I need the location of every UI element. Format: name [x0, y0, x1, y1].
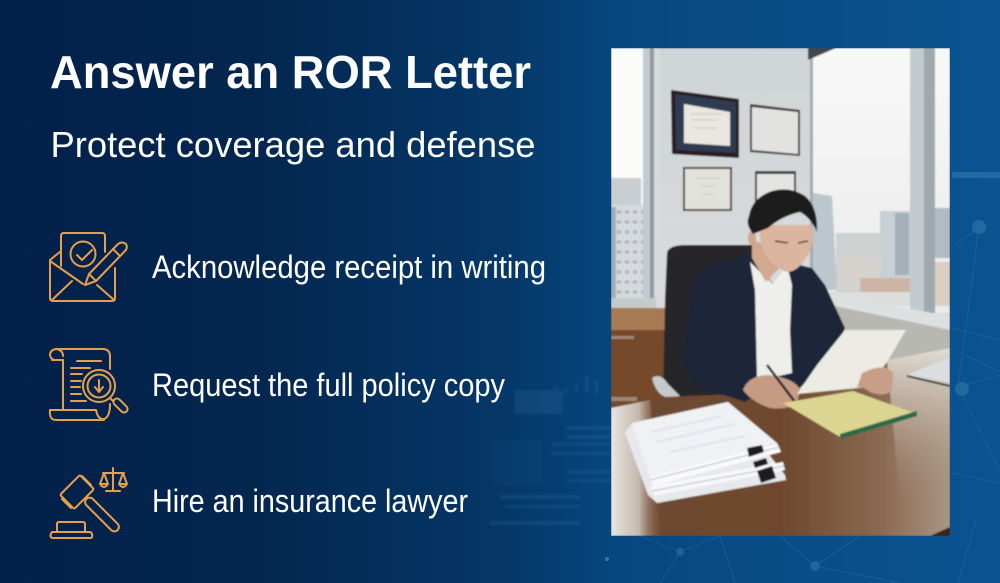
office chair	[652, 245, 760, 400]
framed diploma top right	[750, 104, 800, 156]
window sill and lower wall	[834, 306, 950, 360]
background network pattern	[605, 172, 1000, 583]
pen and hand	[743, 365, 800, 408]
step 1 text: Acknowledge receipt in writing	[152, 249, 546, 285]
jacket	[683, 253, 845, 402]
sheet of paper held	[797, 330, 906, 394]
left window with building	[611, 48, 644, 298]
icon: policy scroll with magnifier	[50, 349, 129, 420]
right window with skyline	[812, 48, 950, 313]
framed diploma lower right	[754, 170, 797, 203]
stack of papers	[625, 402, 786, 503]
laptop	[907, 357, 950, 383]
step 3 text: Hire an insurance lawyer	[152, 483, 468, 519]
right window frame	[808, 48, 935, 318]
office wall	[655, 48, 950, 390]
neck and face	[748, 189, 817, 282]
framed diploma lower left	[683, 167, 732, 211]
title: Answer an ROR Letter	[50, 46, 531, 98]
icon: gavel and scales	[50, 468, 127, 538]
desk window reflection	[611, 400, 662, 536]
desk dark corner	[930, 527, 950, 536]
subtitle: Protect coverage and defense	[50, 124, 536, 165]
binder clips	[747, 445, 776, 483]
yellow legal pad	[783, 391, 917, 439]
step 2 text: Request the full policy copy	[152, 367, 505, 403]
framed diploma large	[671, 90, 739, 158]
wooden cabinet	[611, 308, 667, 408]
right hand	[857, 368, 893, 395]
photo: lawyer reviewing documents at desk	[611, 48, 950, 536]
background faint chart lines	[490, 375, 611, 525]
icon: envelope with check and pencil	[50, 233, 127, 301]
left window frame	[611, 48, 660, 308]
white shirt	[750, 262, 792, 378]
desk	[611, 348, 950, 536]
